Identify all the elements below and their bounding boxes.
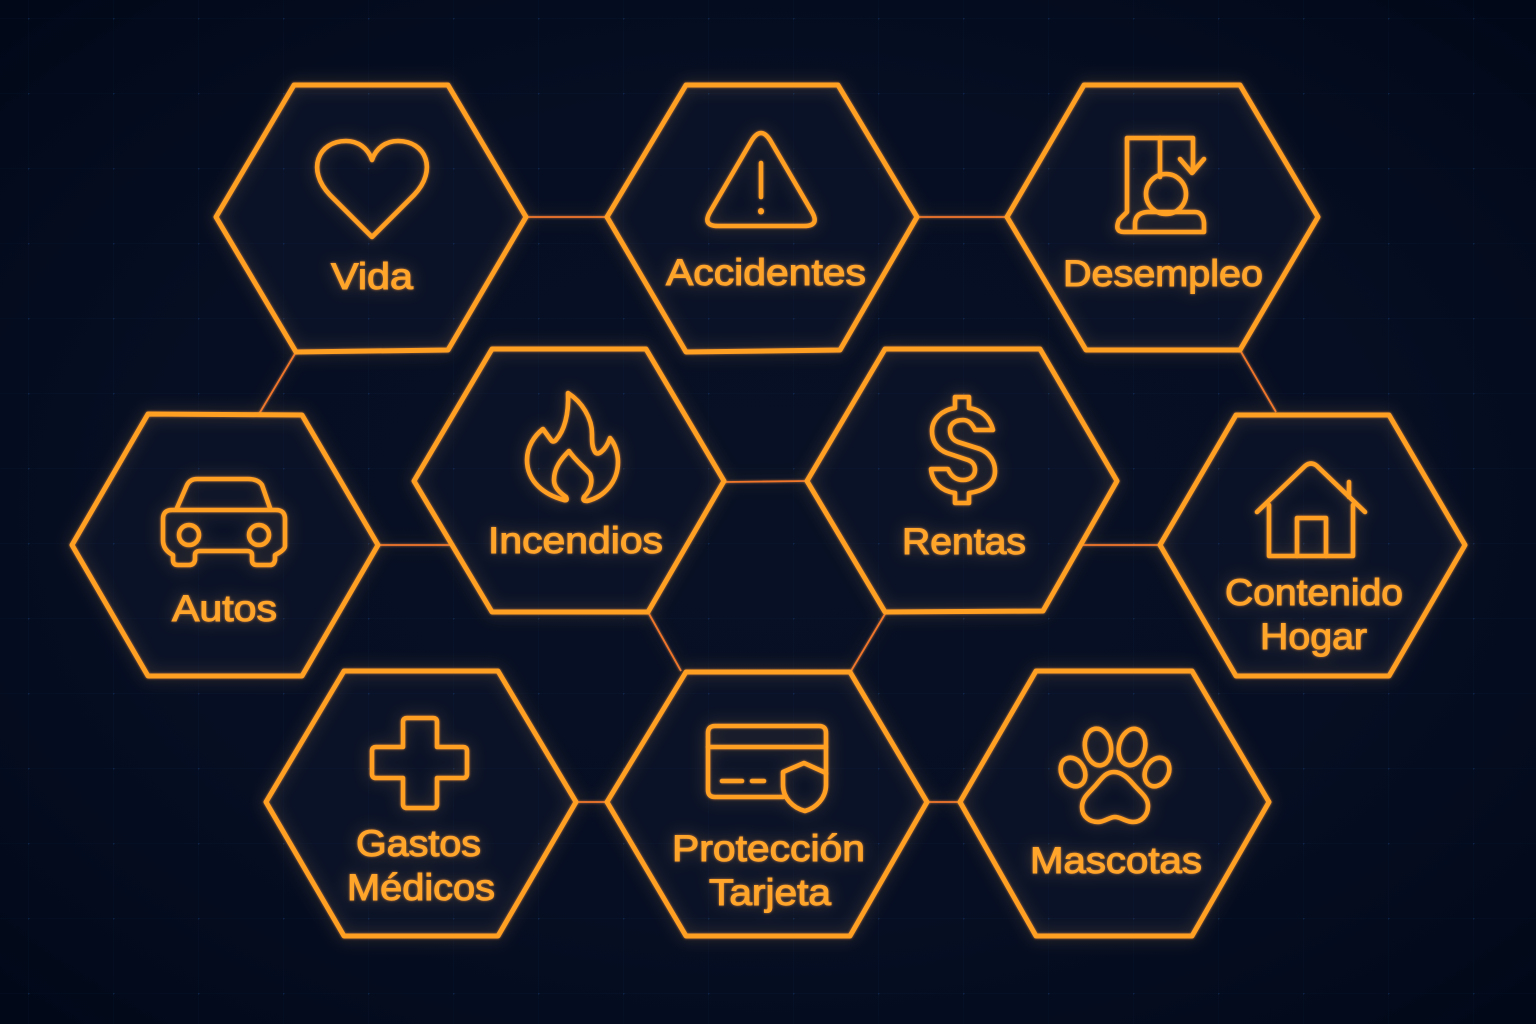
label: Contenido Hogar: Contenido bbox=[1225, 572, 1403, 613]
icon: warning triangle bbox=[707, 133, 815, 226]
label: Mascotas: Mascotas bbox=[1030, 840, 1202, 881]
label: Desempleo: Desempleo bbox=[1063, 253, 1263, 294]
icon: paw bbox=[1056, 726, 1174, 822]
icon: car bbox=[163, 479, 285, 565]
label: Gastos Médicos: Médicos bbox=[347, 867, 495, 908]
label: Protección Tarjeta bbox=[672, 828, 865, 913]
icon: dollar sign bbox=[931, 397, 995, 503]
panel: Gastos Médicos bbox=[266, 671, 576, 936]
label: Gastos Médicos bbox=[347, 823, 495, 908]
panel: Incendios bbox=[414, 349, 724, 612]
label: Gastos Médicos: Gastos bbox=[356, 823, 481, 864]
panel: Rentas bbox=[807, 349, 1117, 612]
icon: medical cross bbox=[372, 718, 467, 808]
panel: Vida bbox=[216, 85, 526, 352]
connector lines bbox=[259, 217, 1276, 802]
icon: card with shield bbox=[708, 726, 826, 811]
label: Contenido Hogar bbox=[1225, 572, 1403, 657]
label: Accidentes: Accidentes bbox=[666, 252, 866, 293]
icon: flame bbox=[527, 393, 618, 501]
label: Rentas: Rentas bbox=[902, 521, 1026, 562]
label: Vida: Vida bbox=[331, 256, 413, 297]
panel: Desempleo bbox=[1007, 85, 1318, 350]
label: Incendios: Incendios bbox=[488, 520, 663, 561]
panel: Accidentes bbox=[607, 85, 917, 352]
panel: Protección Tarjeta bbox=[607, 672, 927, 936]
label: Protección Tarjeta: Tarjeta bbox=[709, 872, 831, 913]
panel: Contenido Hogar bbox=[1160, 415, 1465, 676]
label: Protección Tarjeta: Protección bbox=[672, 828, 865, 869]
panel: Autos bbox=[72, 414, 378, 676]
icon: person with down arrow bbox=[1117, 138, 1204, 232]
icon: house bbox=[1257, 464, 1365, 556]
label: Contenido Hogar: Hogar bbox=[1260, 616, 1367, 657]
hexagon backgrounds bbox=[72, 85, 1465, 936]
label: Autos: Autos bbox=[172, 588, 277, 629]
icon: heart bbox=[317, 141, 427, 237]
panel: Mascotas bbox=[960, 671, 1269, 936]
